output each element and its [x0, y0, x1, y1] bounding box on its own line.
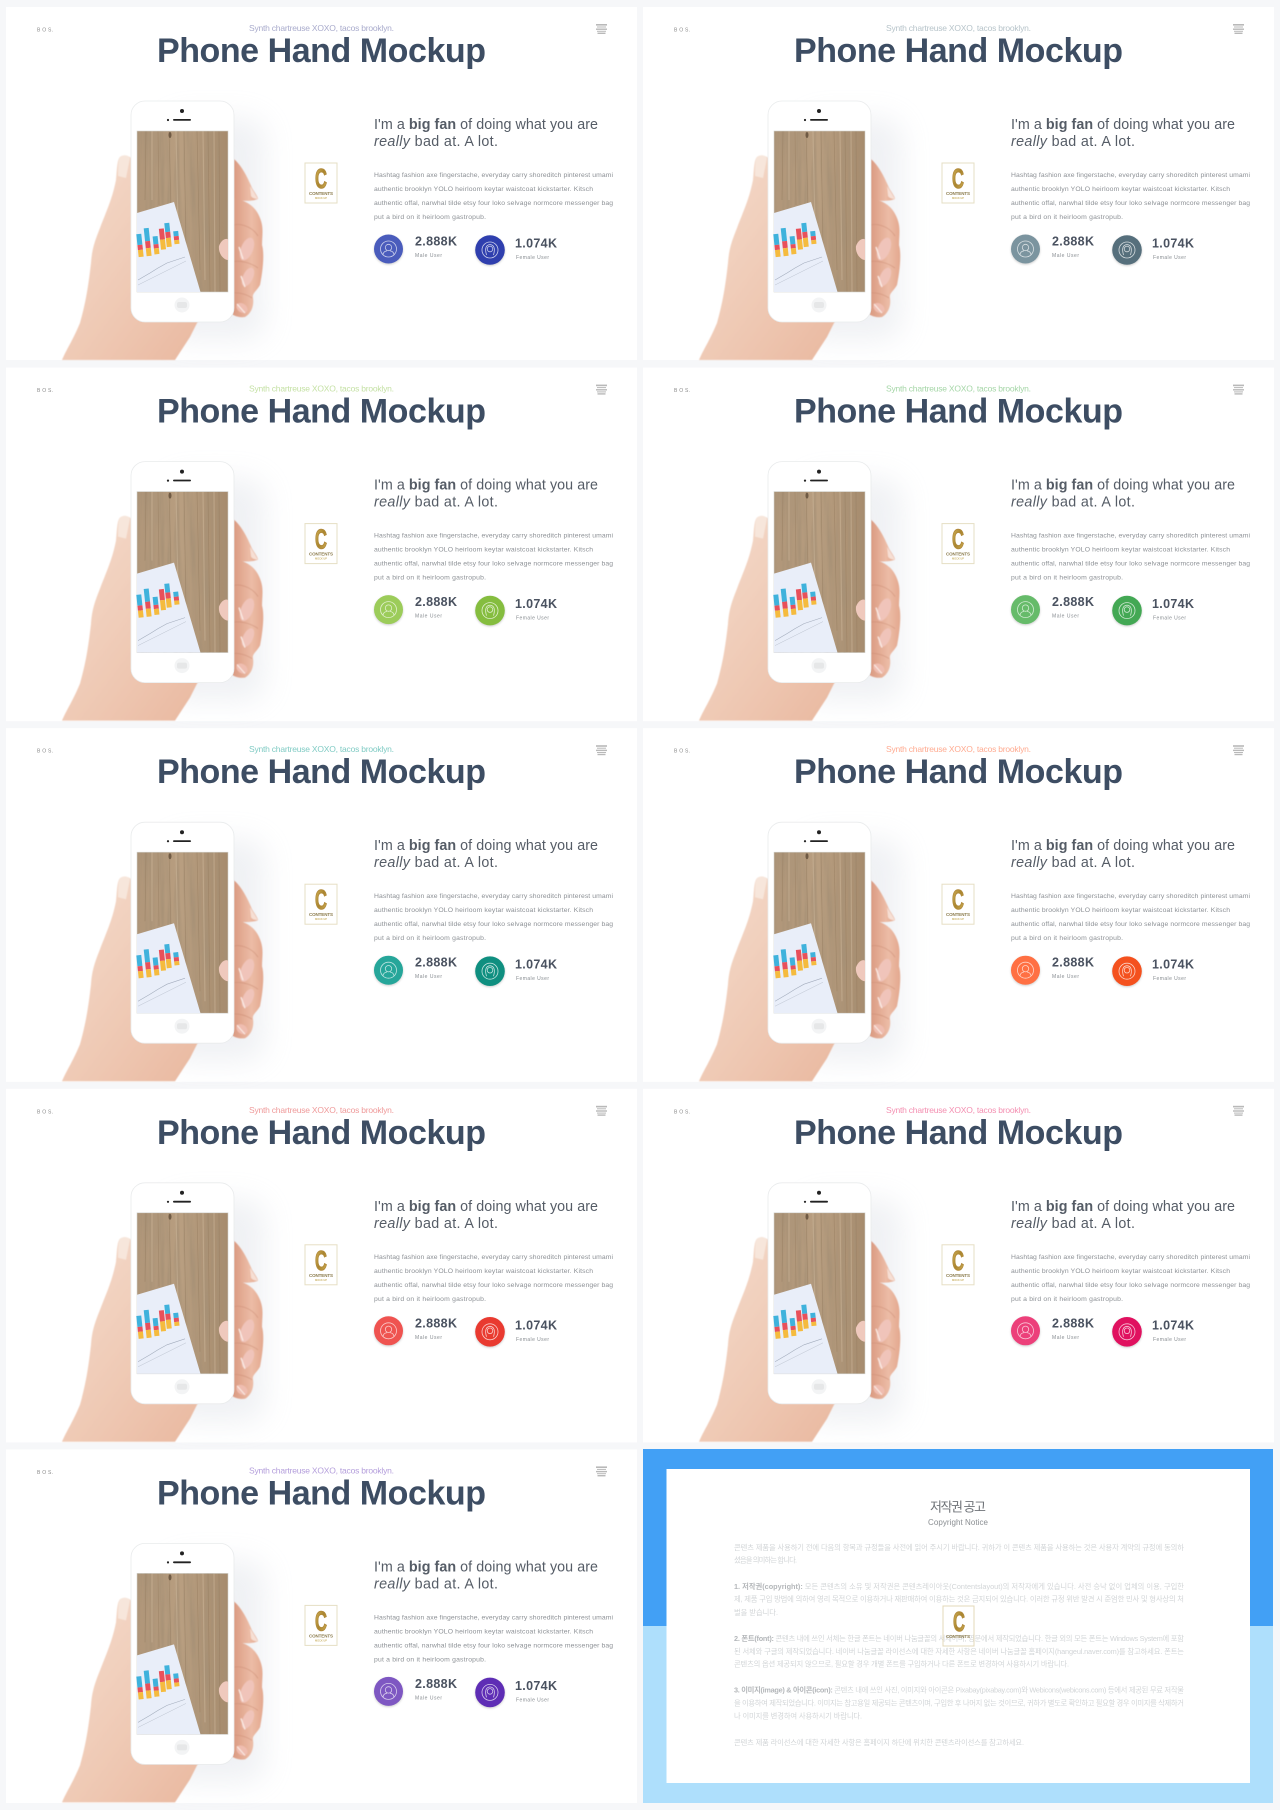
stat: male user: Male User [415, 1335, 442, 1341]
notice: image clause: 3. 이미지(image) & 아이콘(icon): 콘텐츠 내에 쓰인 사진, 이미지와 아이콘은 Pixabay(pixabay.com)와 Webicons(webicons.com) 등에서 제공된 무료 저작물 [734, 1686, 1184, 1694]
heading: I'm a big fan of doing what you are [374, 478, 598, 494]
body text: authentic brooklyn YOLO heirloom keytar waistcoat kickstarter. Kitsch [374, 547, 593, 554]
heading: really bad at. A lot. [1011, 134, 1135, 150]
stat: male user: Male User [415, 974, 442, 980]
gold logo: CONTENTS [946, 1273, 970, 1278]
stat: female user: Female User [1153, 976, 1186, 982]
body text: put a bird on it heirloom gastropub. [1011, 575, 1123, 582]
heading: I'm a big fan of doing what you are [1011, 478, 1235, 494]
gold logo: C [315, 1245, 327, 1276]
stat: male user [374, 1677, 457, 1706]
title: Phone Hand Mockup [157, 1114, 486, 1152]
gold logo: CONTENTS [309, 912, 333, 917]
body text: Hashtag fashion axe fingerstache, everyday carry shoreditch pinterest umami [374, 1614, 613, 1621]
small logo text: B O S. [37, 749, 53, 755]
stat: male user: 2.888K [415, 595, 457, 609]
stat: male user: Male User [1052, 614, 1079, 620]
gold logo [942, 524, 974, 564]
stat: female user: 1.074K [1152, 958, 1194, 972]
small logo text: B O S. [674, 28, 690, 34]
body text: authentic brooklyn YOLO heirloom keytar waistcoat kickstarter. Kitsch [374, 1628, 593, 1635]
body text: put a bird on it heirloom gastropub. [1011, 214, 1123, 221]
stat: female user: Female User [516, 1697, 549, 1703]
notice intro: 콘텐츠 제품을 사용하기 전에 다음의 항목과 규정들을 사전에 읽어 주시기 바랍니다. 귀하가 이 콘텐츠 제품을 사용하는 것은 사용자 계약의 규정에 동의하 [734, 1543, 1184, 1552]
stat: female user: 1.074K [1152, 236, 1194, 250]
stat: female user: Female User [516, 1337, 549, 1343]
gold logo [942, 163, 974, 203]
body text [1011, 172, 1250, 221]
heading: I'm a big fan of doing what you are [374, 838, 598, 854]
stat: male user: Male User [415, 614, 442, 620]
body text: put a bird on it heirloom gastropub. [374, 1656, 486, 1663]
stat: male user: Male User [415, 253, 442, 259]
heading: I'm a big fan of doing what you are [1011, 838, 1235, 854]
small logo text: B O S. [37, 1109, 53, 1115]
body text: authentic offal, narwhal tilde etsy four loko selvage normcore messenger bag [374, 1642, 613, 1649]
heading: really bad at. A lot. [374, 1216, 498, 1232]
menu icon [596, 1466, 607, 1476]
menu icon [1233, 1106, 1244, 1116]
menu icon [1233, 24, 1244, 34]
body text: Hashtag fashion axe fingerstache, everyday carry shoreditch pinterest umami [374, 893, 613, 900]
small logo text: B O S. [37, 1470, 53, 1476]
gold logo: CONTENTS [309, 191, 333, 196]
notice: copyright clause: 1. 저작권(copyright): 모든 콘텐츠의 소유 및 저작권은 콘텐츠레이아웃(Contentslayout)의 저작자에게 있습니다. 사전 승낙 없이 업체의 이용, 구입한 [734, 1582, 1184, 1591]
gold logo [305, 884, 337, 924]
phone in hand [62, 1183, 265, 1442]
stat: female user [475, 596, 557, 625]
body text [374, 893, 613, 942]
body text: authentic brooklyn YOLO heirloom keytar waistcoat kickstarter. Kitsch [374, 186, 593, 193]
gold logo: CONTENTS [309, 552, 333, 557]
stat: male user: Male User [1052, 1335, 1079, 1341]
body text: Hashtag fashion axe fingerstache, everyday carry shoreditch pinterest umami [1011, 893, 1250, 900]
subtitle: Synth chartreuse XOXO, tacos brooklyn. [249, 384, 394, 394]
body text [374, 1254, 613, 1303]
subtitle: Synth chartreuse XOXO, tacos brooklyn. [886, 384, 1031, 394]
body text [374, 533, 613, 582]
heading [1011, 117, 1235, 150]
stat: female user: 1.074K [515, 597, 557, 611]
gold logo: MOCK UP [315, 917, 327, 921]
stat: male user [374, 956, 457, 985]
heading: I'm a big fan of doing what you are [374, 1559, 598, 1575]
gold logo: MOCK UP [315, 1278, 327, 1282]
gold logo: CONTENTS [309, 1273, 333, 1278]
stat: female user: 1.074K [515, 958, 557, 972]
gold logo [942, 1245, 974, 1285]
title: Phone Hand Mockup [794, 393, 1123, 431]
body text: put a bird on it heirloom gastropub. [374, 1296, 486, 1303]
panel: green slide [643, 368, 1274, 721]
notice intro [734, 1543, 1184, 1564]
title: Phone Hand Mockup [794, 32, 1123, 70]
stat: male user [374, 1316, 457, 1345]
heading: really bad at. A lot. [374, 1576, 498, 1592]
gold logo: C [315, 1605, 327, 1636]
gold logo: C [952, 163, 964, 194]
stat: female user [475, 1317, 557, 1347]
body text: Hashtag fashion axe fingerstache, everyday carry shoreditch pinterest umami [374, 533, 613, 540]
stat: female user: Female User [1153, 255, 1186, 261]
phone in hand [62, 462, 265, 721]
title: Phone Hand Mockup [157, 753, 486, 791]
heading [1011, 838, 1235, 871]
subtitle: Synth chartreuse XOXO, tacos brooklyn. [886, 744, 1031, 754]
stat: male user: 2.888K [415, 1316, 457, 1330]
menu icon [596, 1106, 607, 1116]
body text [1011, 893, 1250, 942]
phone in hand [699, 101, 902, 360]
title: Phone Hand Mockup [157, 1474, 486, 1512]
gold logo: MOCK UP [315, 196, 327, 200]
gold logo: MOCK UP [952, 557, 964, 561]
subtitle: Synth chartreuse XOXO, tacos brooklyn. [249, 1465, 394, 1475]
notice: image clause [734, 1686, 1184, 1720]
stat: female user: 1.074K [1152, 1318, 1194, 1332]
panel: orange slide [643, 728, 1274, 1082]
notice: font clause: 콘텐츠의 옵션 제공되지 않으므로, 필요할 경우 개별 폰트를 구입하거나 다른 폰트로 변경하여 사용하시기 바랍니다. [734, 1660, 1069, 1668]
small logo text: B O S. [674, 749, 690, 755]
gold logo: MOCK UP [952, 917, 964, 921]
gold logo: MOCK UP [315, 557, 327, 561]
body text: authentic brooklyn YOLO heirloom keytar waistcoat kickstarter. Kitsch [374, 907, 593, 914]
heading: I'm a big fan of doing what you are [374, 1199, 598, 1215]
stat: female user: Female User [1153, 1337, 1186, 1343]
body text [374, 1614, 613, 1663]
body text: authentic offal, narwhal tilde etsy four loko selvage normcore messenger bag [374, 921, 613, 928]
stat: male user: 2.888K [415, 956, 457, 970]
body text [1011, 533, 1250, 582]
body text: Hashtag fashion axe fingerstache, everyday carry shoreditch pinterest umami [1011, 1254, 1250, 1261]
notice: copyright clause [734, 1582, 1184, 1617]
gold logo [305, 524, 337, 564]
notice intro: 셨음을 의미하는 합니다. [734, 1556, 797, 1564]
panel: copyright notice [643, 1449, 1273, 1803]
body text: Hashtag fashion axe fingerstache, everyday carry shoreditch pinterest umami [374, 1254, 613, 1261]
heading [374, 1559, 598, 1592]
body text: Hashtag fashion axe fingerstache, everyday carry shoreditch pinterest umami [374, 172, 613, 179]
notice: font clause: 된 서체와 구글의 제작되었습니다. 네이버 나눔글꼴 라이선스에 대한 자세한 사항은 네이버 나눔글꼴 홈페이지(hangeul.naver.com)를 참고하세요. 폰트는 [734, 1647, 1184, 1656]
title: Phone Hand Mockup [157, 32, 486, 70]
stat: male user: Male User [415, 1695, 442, 1701]
stat: male user: 2.888K [415, 234, 457, 248]
body text: authentic offal, narwhal tilde etsy four loko selvage normcore messenger bag [374, 561, 613, 568]
body text: authentic offal, narwhal tilde etsy four loko selvage normcore messenger bag [1011, 200, 1250, 207]
stat: female user: 1.074K [515, 236, 557, 250]
stat: female user: Female User [516, 976, 549, 982]
menu icon [1233, 385, 1244, 395]
notice: font clause [734, 1634, 1184, 1668]
phone in hand [62, 101, 265, 360]
gold logo: C [952, 524, 964, 555]
gold logo: C [953, 1606, 965, 1637]
stat: male user [1011, 234, 1094, 264]
gold logo [305, 1605, 337, 1645]
stat: female user: 1.074K [1152, 597, 1194, 611]
stat: female user: 1.074K [515, 1318, 557, 1332]
title: Phone Hand Mockup [794, 1114, 1123, 1152]
stat: male user: Male User [1052, 253, 1079, 259]
gold logo [305, 1245, 337, 1285]
body text: authentic brooklyn YOLO heirloom keytar waistcoat kickstarter. Kitsch [1011, 186, 1230, 193]
heading [1011, 1199, 1235, 1232]
panel: blue-grey slide [643, 7, 1274, 360]
body text: put a bird on it heirloom gastropub. [1011, 1296, 1123, 1303]
body text: authentic offal, narwhal tilde etsy four loko selvage normcore messenger bag [1011, 561, 1250, 568]
heading: I'm a big fan of doing what you are [374, 117, 598, 133]
body text: authentic brooklyn YOLO heirloom keytar waistcoat kickstarter. Kitsch [1011, 1268, 1230, 1275]
stat: female user [1112, 1317, 1194, 1347]
gold logo: CONTENTS [946, 912, 970, 917]
panel: purple slide [6, 1449, 637, 1803]
title: Phone Hand Mockup [157, 393, 486, 431]
body text: authentic brooklyn YOLO heirloom keytar waistcoat kickstarter. Kitsch [374, 1268, 593, 1275]
gold logo [305, 163, 337, 203]
small logo text: B O S. [674, 388, 690, 394]
phone in hand [699, 822, 902, 1081]
heading [374, 478, 598, 511]
phone in hand [62, 1543, 265, 1802]
body text: authentic offal, narwhal tilde etsy four loko selvage normcore messenger bag [1011, 1282, 1250, 1289]
heading: really bad at. A lot. [374, 855, 498, 871]
heading: really bad at. A lot. [1011, 855, 1135, 871]
stat: female user [475, 235, 557, 265]
gold logo: C [315, 884, 327, 915]
body text: put a bird on it heirloom gastropub. [374, 575, 486, 582]
gold logo: C [315, 524, 327, 555]
panel: pink slide [643, 1089, 1274, 1442]
stat: female user [1112, 596, 1194, 625]
gold logo: CONTENTS [309, 1633, 333, 1638]
stat: female user: 1.074K [515, 1679, 557, 1693]
notice: image clause: 나 이미지를 변경하여 사용하시기 바랍니다. [734, 1712, 862, 1720]
stat: female user: Female User [516, 255, 549, 261]
body text: authentic offal, narwhal tilde etsy four loko selvage normcore messenger bag [1011, 921, 1250, 928]
menu icon [596, 24, 607, 34]
subtitle: Synth chartreuse XOXO, tacos brooklyn. [249, 23, 394, 33]
body text: put a bird on it heirloom gastropub. [1011, 935, 1123, 942]
stat: male user: Male User [1052, 974, 1079, 980]
heading: really bad at. A lot. [1011, 1216, 1135, 1232]
phone in hand [699, 462, 902, 721]
heading [374, 1199, 598, 1232]
notice heading: 저작권 공고 [930, 1500, 986, 1514]
gold logo: CONTENTS [946, 552, 970, 557]
stat: male user: 2.888K [1052, 1316, 1094, 1330]
subtitle: Synth chartreuse XOXO, tacos brooklyn. [249, 1105, 394, 1115]
small logo text: B O S. [674, 1109, 690, 1115]
heading: really bad at. A lot. [374, 495, 498, 511]
notice: copyright clause: 벌을 받습니다. [734, 1608, 778, 1617]
stat: male user [374, 234, 457, 264]
heading: I'm a big fan of doing what you are [1011, 1199, 1235, 1215]
body text: authentic offal, narwhal tilde etsy four loko selvage normcore messenger bag [374, 1282, 613, 1289]
panel: indigo slide [6, 7, 637, 360]
subtitle: Synth chartreuse XOXO, tacos brooklyn. [886, 1105, 1031, 1115]
subtitle: Synth chartreuse XOXO, tacos brooklyn. [249, 744, 394, 754]
phone in hand [699, 1183, 902, 1442]
heading: really bad at. A lot. [374, 134, 498, 150]
body text: Hashtag fashion axe fingerstache, everyday carry shoreditch pinterest umami [1011, 533, 1250, 540]
subtitle: Synth chartreuse XOXO, tacos brooklyn. [886, 23, 1031, 33]
body text [374, 172, 613, 221]
gold logo: CONTENTS [946, 1634, 970, 1639]
gold logo: MOCK UP [315, 1638, 327, 1642]
title: Phone Hand Mockup [794, 753, 1123, 791]
body text: authentic brooklyn YOLO heirloom keytar waistcoat kickstarter. Kitsch [1011, 907, 1230, 914]
gold logo: C [952, 1245, 964, 1276]
notice: image clause: 을 이용하여 제작되었습니다. 이미지는 참고용일 제공되는 콘텐츠이며, 구입한 후 나머지 없는 것이므로, 귀하가 별도로 확인하고 필요할 경우 이미지를 삭제하거 [734, 1698, 1184, 1708]
body text: put a bird on it heirloom gastropub. [374, 935, 486, 942]
heading [374, 117, 598, 150]
stat: male user: 2.888K [1052, 956, 1094, 970]
menu icon [596, 385, 607, 395]
menu icon [596, 745, 607, 755]
gold logo: MOCK UP [952, 1278, 964, 1282]
stat: male user [1011, 595, 1094, 624]
small logo text: B O S. [37, 388, 53, 394]
gold logo: MOCK UP [952, 196, 964, 200]
stat: male user [374, 595, 457, 624]
notice subheading: Copyright Notice [928, 1518, 989, 1527]
gold logo [942, 884, 974, 924]
stat: female user: Female User [516, 616, 549, 622]
heading [374, 838, 598, 871]
stat: male user: 2.888K [1052, 595, 1094, 609]
stat: male user [1011, 956, 1094, 985]
gold logo: CONTENTS [946, 191, 970, 196]
menu icon [1233, 745, 1244, 755]
notice: font clause: 2. 폰트(font): 콘텐츠 내에 쓰인 서체는 한글 폰트는 네이버 나눔글꼴의 서체이며, 영문에서 제작되었습니다. 한글 외의 모든 폰트는 Windows System에 포함 [734, 1634, 1184, 1643]
stat: female user: Female User [1153, 616, 1186, 622]
stat: female user [1112, 235, 1194, 265]
body text: authentic brooklyn YOLO heirloom keytar waistcoat kickstarter. Kitsch [1011, 547, 1230, 554]
stat: female user [475, 1678, 557, 1707]
body text: Hashtag fashion axe fingerstache, everyday carry shoreditch pinterest umami [1011, 172, 1250, 179]
heading: really bad at. A lot. [1011, 495, 1135, 511]
stat: male user: 2.888K [415, 1677, 457, 1691]
gold logo [943, 1606, 974, 1646]
notice: license reference: 콘텐츠 제품 라이선스에 대한 자세한 사항은 홈페이지 하단에 위치한 콘텐츠라이선스를 참고하세요. [734, 1738, 1024, 1747]
stat: female user [475, 956, 557, 986]
gold logo: C [952, 884, 964, 915]
phone in hand [62, 822, 265, 1081]
gold logo: C [315, 163, 327, 194]
panel: red slide [6, 1089, 637, 1442]
heading: I'm a big fan of doing what you are [1011, 117, 1235, 133]
body text: put a bird on it heirloom gastropub. [374, 214, 486, 221]
panel: teal slide [6, 728, 637, 1082]
panel: light green slide [6, 368, 637, 721]
stat: male user [1011, 1316, 1094, 1345]
small logo text: B O S. [37, 28, 53, 34]
stat: male user: 2.888K [1052, 234, 1094, 248]
body text [1011, 1254, 1250, 1303]
stat: female user [1112, 956, 1194, 986]
notice: copyright clause: 제, 제품 구입 방법에 의하여 영리 목적으로 이용하거나 재판매하여 이용하는 것은 금지되어 있습니다. 이러한 규정 위반 발견 시 준엄한 민사 및 형사상의 처 [734, 1594, 1184, 1604]
body text: authentic offal, narwhal tilde etsy four loko selvage normcore messenger bag [374, 200, 613, 207]
heading [1011, 478, 1235, 511]
